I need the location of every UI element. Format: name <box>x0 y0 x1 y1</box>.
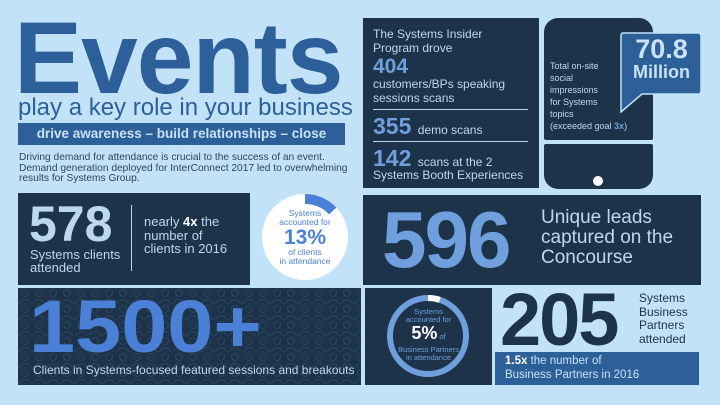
panel: 578 clients: attended <box>30 260 81 275</box>
panel: systems insider: Systems Booth Experiences <box>373 168 523 182</box>
tagline bar <box>18 123 345 145</box>
panel: 5% donut: Systems <box>414 307 443 316</box>
icon: phone with social impressions: social <box>550 73 573 83</box>
panel: 578 clients: 578 <box>29 196 112 252</box>
stat: 205 partners: attended <box>639 332 686 346</box>
icon: phone with social impressions: Total on-site <box>550 61 599 71</box>
panel: 5% donut <box>365 288 492 385</box>
panel: 596 leads: 596 <box>382 195 509 284</box>
bar: 1.5x partners <box>495 352 699 385</box>
chart: 13% donut: in attendance <box>279 256 331 266</box>
bar: 1.5x partners: Business Partners in 2016 <box>505 368 639 380</box>
panel: systems insider <box>363 18 539 188</box>
panel: 5% donut: 5% of <box>411 323 446 343</box>
icon: phone with social impressions: for Systems <box>550 97 598 107</box>
intro text: Driving demand for attendance is crucial to the success of an event. Demand generation deployed for InterConnect 2017 led to overwhelming results for Systems Group. <box>19 152 347 184</box>
icon: phone with social impressions: (exceeded goal 3x) <box>550 121 627 131</box>
panel: systems insider: 355 demo scans <box>373 113 482 139</box>
panel: 5% donut: accounted for Business Partners <box>398 315 459 354</box>
chart: 13% donut: 13% <box>284 226 326 249</box>
panel: systems insider: sessions scans <box>373 90 454 104</box>
panel: 596 leads: Unique leads <box>541 207 652 228</box>
icon: phone with social impressions <box>544 18 653 189</box>
panel: 1500+: Clients in Systems-focused featured sessions and breakouts <box>33 363 354 377</box>
icon: phone with social impressions: topics <box>550 109 574 119</box>
subtitle: play a key role in your business <box>18 94 353 121</box>
panel: 578 clients: clients in 2016 <box>144 241 227 256</box>
panel: 596 leads: Concourse <box>541 247 633 268</box>
callout: 70.8 Million <box>620 32 700 113</box>
panel: systems insider: 142 scans at the 2 <box>373 145 492 171</box>
panel: 578 clients <box>18 193 250 285</box>
stat: 205 partners: Systems <box>639 291 685 305</box>
stat: 205 partners: Partners <box>639 318 684 332</box>
panel: systems insider: The Systems Insider <box>373 27 482 41</box>
bar: 1.5x partners: 1.5x the number of <box>505 355 602 367</box>
callout: 70.8 Million: 70.8 <box>635 34 688 64</box>
panel: systems insider: customers/BPs speaking <box>373 77 505 91</box>
panel: 578 clients: Systems clients <box>30 247 120 262</box>
chart: 13% donut <box>262 194 348 280</box>
stat: 205 partners <box>500 278 688 361</box>
panel: systems insider: Program drove <box>373 40 452 54</box>
panel: 596 leads: captured on the <box>541 227 673 248</box>
stat: 205 partners: Business <box>639 304 688 318</box>
panel: 5% donut: in attendance <box>406 353 451 362</box>
panel: systems insider: 404 <box>373 55 408 78</box>
stat: 205 partners: 205 <box>500 278 617 361</box>
icon: phone with social impressions: impressions <box>550 85 598 95</box>
callout: 70.8 Million: Million <box>633 62 690 82</box>
panel: 1500+ <box>18 288 361 385</box>
tagline bar: drive awareness – build relationships – close deals <box>37 126 326 163</box>
panel: 578 clients: number of <box>144 228 203 242</box>
chart: 13% donut: Systems <box>289 208 321 218</box>
title: Events <box>14 1 342 115</box>
panel: 578 clients: nearly 4x the <box>144 214 219 229</box>
panel: 596 leads <box>363 195 701 285</box>
chart: 13% donut: accounted for of clients <box>279 217 331 257</box>
